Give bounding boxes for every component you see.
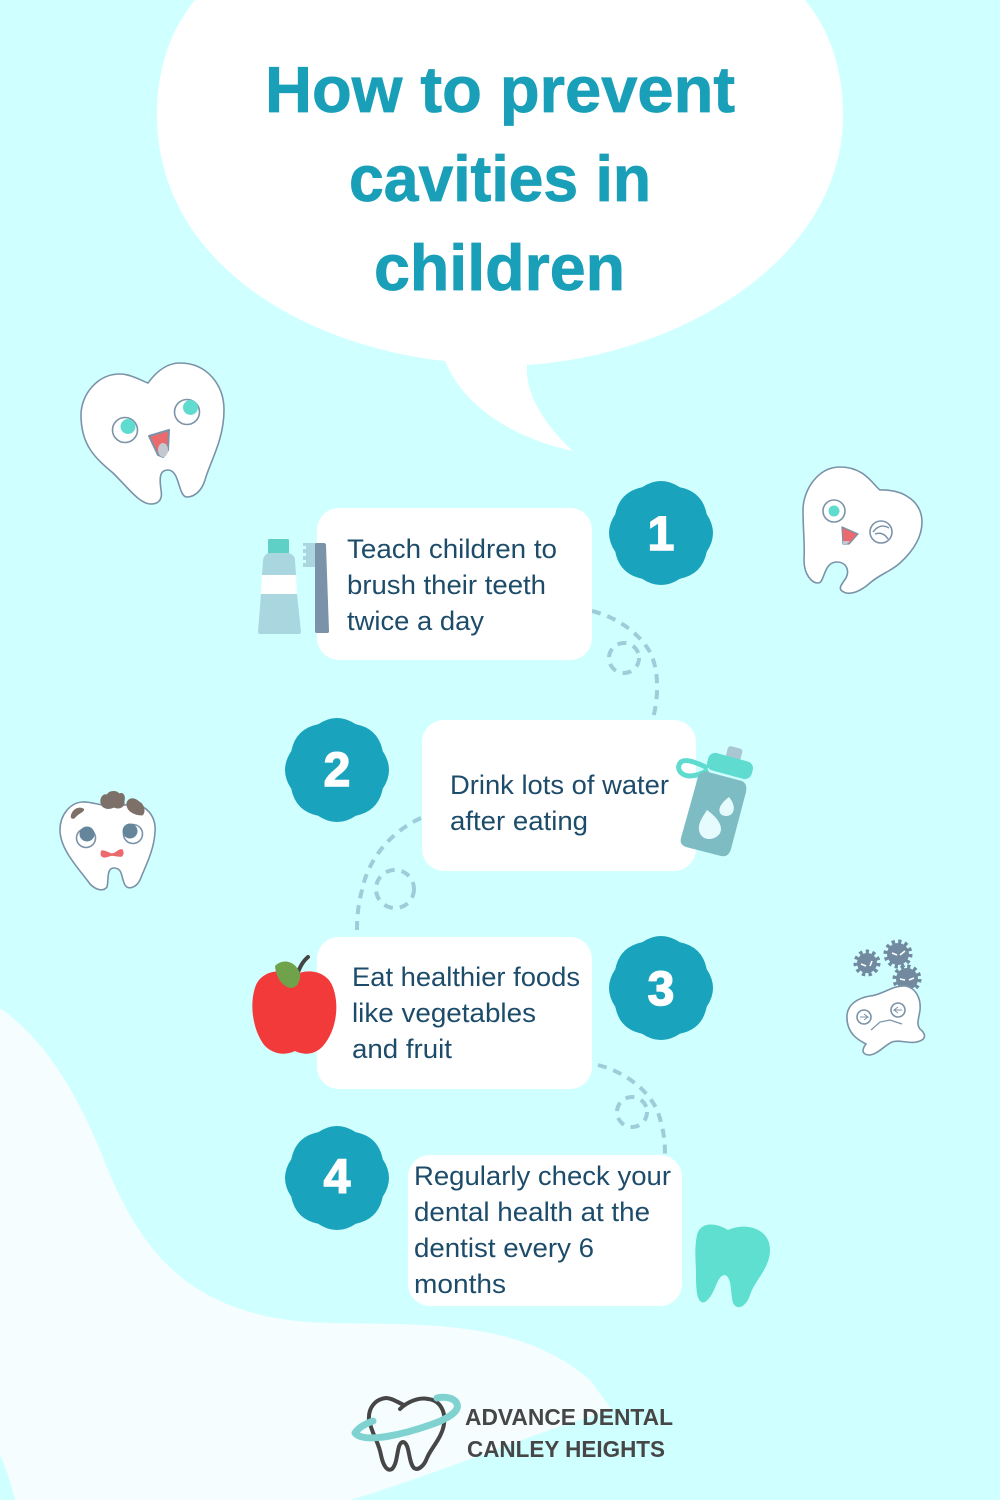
dashed path 3 xyxy=(598,1065,665,1155)
badge 2 xyxy=(285,718,389,822)
step 2 card: after eating xyxy=(450,806,588,836)
tooth character: decayed xyxy=(60,792,155,890)
icon: water bottle xyxy=(679,745,755,856)
step 4 card: dentist every 6 xyxy=(414,1233,594,1263)
step 3 card: like vegetables xyxy=(352,998,536,1028)
step 4 card xyxy=(408,1155,682,1306)
title: How to prevent xyxy=(265,53,735,126)
step 4 card: dental health at the xyxy=(414,1197,650,1227)
title: children xyxy=(374,231,625,304)
step 4 card: Regularly check your xyxy=(414,1161,671,1191)
step 1 card xyxy=(317,508,592,660)
title xyxy=(265,53,735,304)
tooth character: sick with bacteria xyxy=(847,942,925,1055)
badge 1 xyxy=(609,481,713,585)
step 2 card xyxy=(422,720,696,871)
step 1 card: twice a day xyxy=(347,606,484,636)
dashed path 2 xyxy=(357,818,421,930)
logo xyxy=(355,1397,673,1470)
step 1 card: Teach children to xyxy=(347,534,557,564)
step 2 card: Drink lots of water xyxy=(450,770,669,800)
dashed path 1 xyxy=(592,611,657,718)
background blob xyxy=(0,1008,612,1500)
step 4 card: months xyxy=(414,1269,506,1299)
logo: CANLEY HEIGHTS xyxy=(467,1436,665,1462)
badge 2: 2 xyxy=(324,744,350,797)
badge 4: 4 xyxy=(324,1151,351,1204)
logo: ADVANCE DENTAL xyxy=(465,1404,673,1430)
step 3 card xyxy=(317,937,592,1089)
step 3 card: Eat healthier foods xyxy=(352,962,580,992)
tooth character: happy xyxy=(81,363,224,504)
speech bubble xyxy=(157,0,843,451)
badge 3 xyxy=(609,936,713,1040)
icon: toothpaste and toothbrush xyxy=(258,539,329,634)
icon: apple xyxy=(252,957,336,1054)
badge 3: 3 xyxy=(648,963,674,1016)
badge 1: 1 xyxy=(648,508,674,561)
title: cavities in xyxy=(349,142,651,215)
step 1 card: brush their teeth xyxy=(347,570,546,600)
step 3 card: and fruit xyxy=(352,1034,453,1064)
icon: teal tooth xyxy=(695,1225,770,1307)
tooth character: winking xyxy=(803,467,922,593)
badge 4 xyxy=(285,1126,389,1230)
